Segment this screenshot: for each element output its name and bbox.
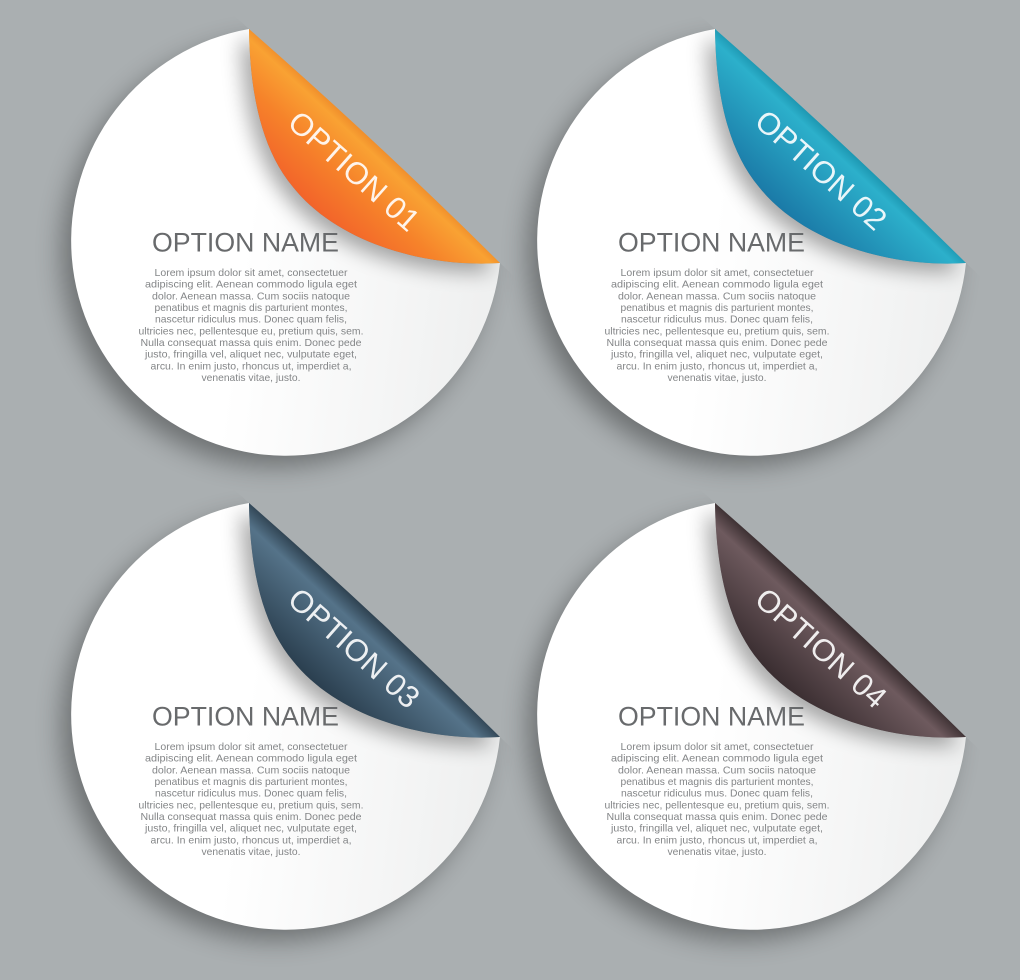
body text: Nulla consequat massa quis enim. Donec pede [140,811,362,823]
heading: option name: OPTION NAME [152,228,339,258]
white sticker body [71,29,500,456]
body text: Nulla consequat massa quis enim. Donec pede [606,811,828,823]
body text: Lorem ipsum dolor sit amet, consectetuer [154,741,348,753]
body text: arcu. In enim justo, rhoncus ut, imperdiet a, [150,834,352,846]
colored flap [715,503,966,738]
white sticker body [537,503,966,930]
body text: ultricies nec, pellentesque eu, pretium quis, sem. [604,325,830,337]
body text: justo, fringilla vel, aliquet nec, vulputate eget, [144,349,357,361]
body text: dolor. Aenean massa. Cum sociis natoque [152,764,350,776]
panel: option 03 [62,503,500,940]
body text: penatibus et magnis dis parturient montes, [620,776,814,788]
body text: adipiscing elit. Aenean commodo ligula eget [145,753,357,765]
body text: adipiscing elit. Aenean commodo ligula eget [611,279,823,291]
body text: justo, fringilla vel, aliquet nec, vulputate eget, [610,823,823,835]
body text: venenatis vitae, justo. [668,372,766,384]
body text: dolor. Aenean massa. Cum sociis natoque [152,290,350,302]
sticker drop shadow [528,40,954,466]
body text: ultricies nec, pellentesque eu, pretium quis, sem. [138,325,364,337]
body text: adipiscing elit. Aenean commodo ligula eget [611,753,823,765]
body text: penatibus et magnis dis parturient montes, [154,302,348,314]
panel: option 01 [62,29,500,466]
body text: Nulla consequat massa quis enim. Donec pede [140,337,362,349]
flap label: OPTION 02 [748,103,894,237]
body text: Lorem ipsum dolor sit amet, consectetuer [620,741,814,753]
heading: option name: OPTION NAME [618,702,805,732]
body text: arcu. In enim justo, rhoncus ut, imperdiet a, [150,360,352,372]
flap label: OPTION 04 [748,581,894,715]
panel: option 04 [528,503,966,940]
body text: ultricies nec, pellentesque eu, pretium quis, sem. [604,799,830,811]
body text: nascetur ridiculus mus. Donec quam felis, [621,314,813,326]
colored flap [249,503,500,738]
body text: nascetur ridiculus mus. Donec quam felis, [155,788,347,800]
body text: Lorem ipsum dolor sit amet, consectetuer [154,267,348,279]
flap label: OPTION 01 [281,104,427,238]
body text [138,741,364,858]
sticker drop shadow [528,514,954,940]
flap shadow [241,37,492,272]
body text [138,267,364,384]
body text [604,267,830,384]
body text: Nulla consequat massa quis enim. Donec pede [606,337,828,349]
body text: adipiscing elit. Aenean commodo ligula eget [145,279,357,291]
body text: penatibus et magnis dis parturient montes, [154,776,348,788]
body text: dolor. Aenean massa. Cum sociis natoque [618,764,816,776]
body text [604,741,830,858]
body text: ultricies nec, pellentesque eu, pretium quis, sem. [138,799,364,811]
flap shadow [707,511,958,746]
heading: option name: OPTION NAME [152,702,339,732]
body text: venenatis vitae, justo. [202,846,300,858]
white sticker body [537,29,966,456]
body text: nascetur ridiculus mus. Donec quam felis, [155,314,347,326]
body text: venenatis vitae, justo. [202,372,300,384]
flap shadow [241,511,492,746]
body text: arcu. In enim justo, rhoncus ut, imperdiet a, [616,360,818,372]
sticker drop shadow [62,40,488,466]
body text: penatibus et magnis dis parturient montes, [620,302,814,314]
body text: dolor. Aenean massa. Cum sociis natoque [618,290,816,302]
sticker drop shadow [62,514,488,940]
flap label: OPTION 03 [281,581,427,715]
body text: arcu. In enim justo, rhoncus ut, imperdiet a, [616,834,818,846]
colored flap [715,29,966,264]
body text: justo, fringilla vel, aliquet nec, vulputate eget, [610,349,823,361]
body text: justo, fringilla vel, aliquet nec, vulputate eget, [144,823,357,835]
heading: option name: OPTION NAME [618,228,805,258]
panel: option 02 [528,29,966,466]
colored flap [249,29,500,264]
white sticker body [71,503,500,930]
body text: Lorem ipsum dolor sit amet, consectetuer [620,267,814,279]
body text: nascetur ridiculus mus. Donec quam felis, [621,788,813,800]
flap shadow [707,37,958,272]
body text: venenatis vitae, justo. [668,846,766,858]
